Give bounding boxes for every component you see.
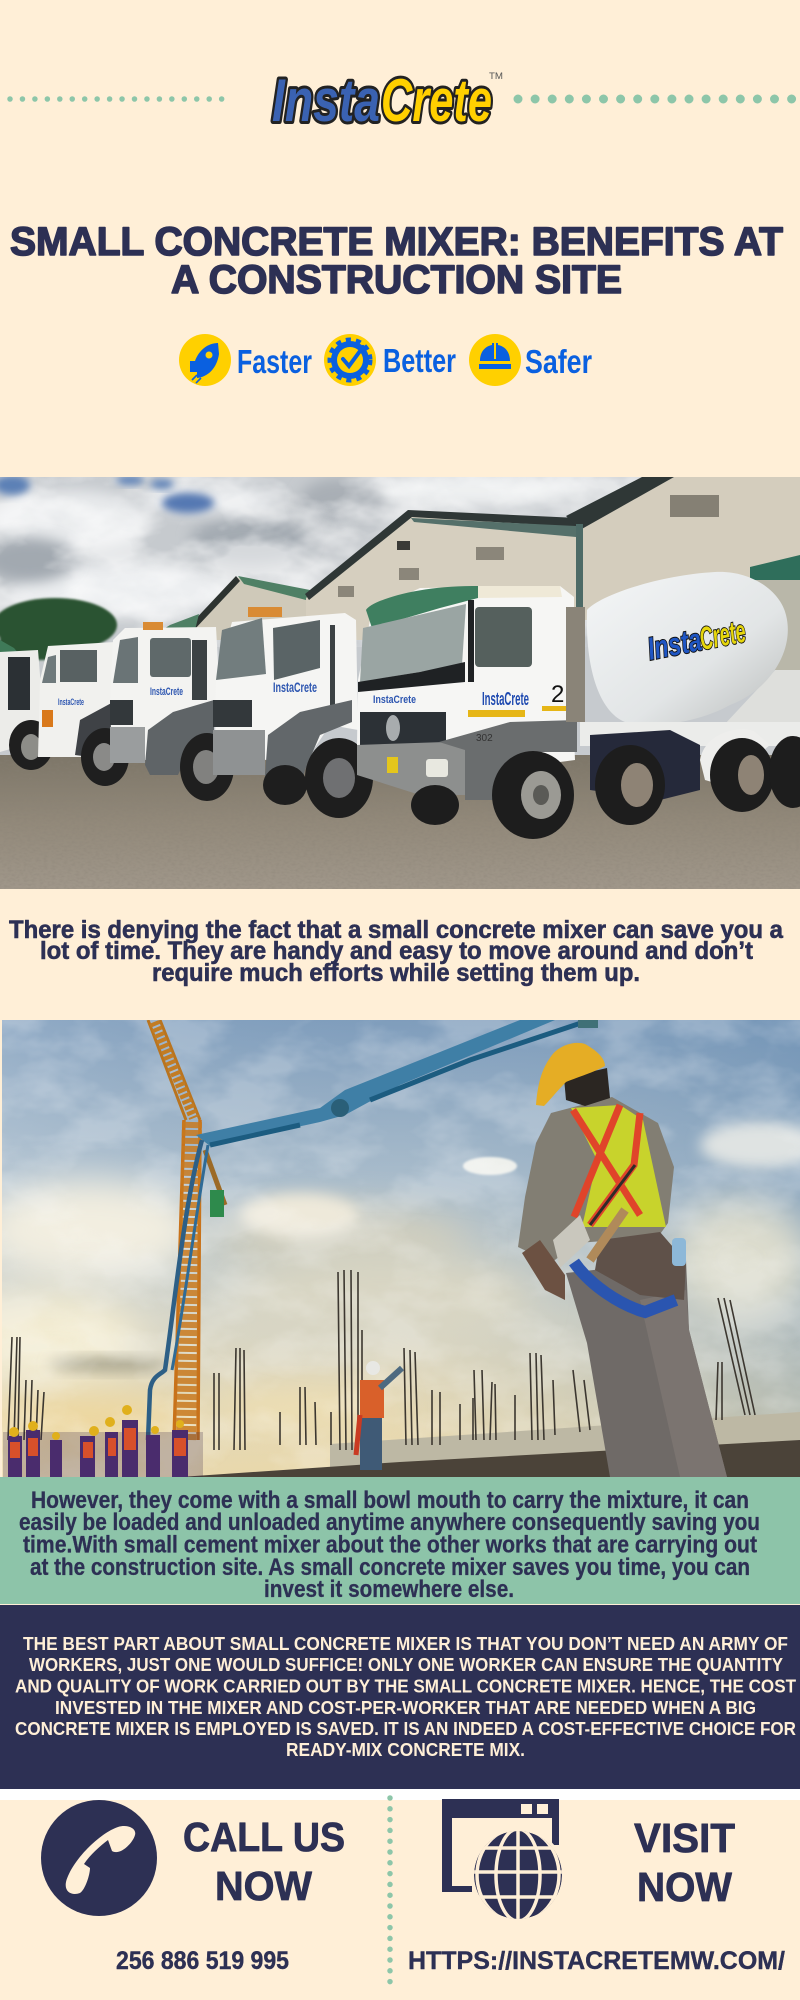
cement drum xyxy=(580,572,800,785)
head and hat xyxy=(564,1068,610,1106)
main truck wheels xyxy=(411,730,800,839)
navy text panel xyxy=(0,1605,800,1789)
cement drum: Crete xyxy=(696,613,748,657)
worker crew at left xyxy=(3,1405,203,1477)
heading: visit now: VISIT xyxy=(634,1815,735,1861)
icon: hard hat, Safer xyxy=(469,334,521,386)
truck 2: InstaCrete xyxy=(150,686,183,698)
tower crane xyxy=(148,1020,225,1440)
benefit badges row xyxy=(179,334,592,386)
header dotted rule left xyxy=(10,96,234,102)
label: Faster: Faster xyxy=(237,343,312,380)
icon: rocket, Faster xyxy=(179,334,231,386)
phone number: 256 886 519 995 xyxy=(116,1947,289,1975)
truck 0 far left xyxy=(0,650,53,770)
warehouse buildings xyxy=(0,477,800,660)
main truck cab: 2 xyxy=(551,681,564,708)
header dotted rule right xyxy=(518,94,792,104)
high-vis vest xyxy=(571,1105,666,1227)
main truck cab: InstaCrete xyxy=(373,694,416,706)
footer dotted divider xyxy=(387,1798,393,1992)
logo: InstaCrete: TM xyxy=(489,71,503,81)
heading: visit now xyxy=(634,1815,735,1910)
paved ground xyxy=(0,755,800,889)
green panel text xyxy=(19,1487,760,1603)
intro text xyxy=(9,916,784,987)
navy panel text xyxy=(15,1633,797,1760)
green text panel xyxy=(0,1477,800,1604)
tree xyxy=(0,598,117,660)
intro text: lot of time. They are handy and easy to move around and don’t xyxy=(40,937,754,965)
heading: call us now: NOW xyxy=(215,1863,312,1909)
truck 2 xyxy=(110,622,234,801)
truck 3 xyxy=(213,607,373,818)
truck 3: InstaCrete xyxy=(273,679,317,695)
logo: InstaCrete: Insta xyxy=(272,67,380,134)
title xyxy=(10,220,783,302)
rebar columns xyxy=(8,1270,755,1450)
heading: visit now: NOW xyxy=(637,1864,732,1910)
icon: gear check, Better xyxy=(324,334,376,386)
harness straps xyxy=(573,1105,640,1225)
clouds xyxy=(0,1020,800,1477)
photo: row of InstaCrete concrete mixer trucks xyxy=(0,474,800,889)
logo: InstaCrete xyxy=(272,67,503,134)
foreground worker xyxy=(518,1043,727,1477)
heading: call us now: CALL US xyxy=(183,1814,345,1860)
truck 1: InstaCrete xyxy=(58,697,84,707)
icon: browser window and globe xyxy=(442,1799,566,1922)
website url: HTTPS://INSTACRETEMW.COM/ xyxy=(408,1947,785,1975)
white spacer strip xyxy=(0,1789,800,1800)
icon: phone xyxy=(41,1800,157,1916)
cement drum: Insta xyxy=(644,621,704,667)
logo: InstaCrete: Crete xyxy=(381,67,492,134)
legs xyxy=(566,1260,727,1477)
navy panel text: INVESTED IN THE MIXER AND COST-PER-WORKER THAT ARE NEEDED WHEN A BIG xyxy=(55,1697,756,1718)
navy panel text: READY-MIX CONCRETE MIX. xyxy=(286,1739,525,1760)
green panel text: invest it somewhere else. xyxy=(264,1576,514,1603)
jacket xyxy=(518,1097,674,1263)
title: SMALL CONCRETE MIXER: BENEFITS AT xyxy=(10,220,783,264)
photo: safety worker watching concrete pump boom xyxy=(0,1020,800,1477)
concrete pump boom xyxy=(148,1020,598,1440)
intro text: There is denying the fact that a small concrete mixer can save you a xyxy=(9,916,784,944)
arm and hand xyxy=(522,1240,565,1300)
main truck cab: InstaCrete xyxy=(482,689,529,709)
sky clouds xyxy=(0,474,680,647)
label: Safer: Safer xyxy=(525,343,592,380)
heading: call us now xyxy=(183,1814,345,1909)
intro text: require much efforts while setting them up. xyxy=(152,959,640,987)
main truck cab xyxy=(357,586,585,800)
title: A CONSTRUCTION SITE xyxy=(171,258,622,302)
ground and wet concrete xyxy=(180,1412,800,1477)
label: Better: Better xyxy=(383,342,456,379)
main truck cab: 302 xyxy=(476,733,493,744)
distant worker with arm raised xyxy=(356,1361,402,1470)
truck 1 xyxy=(38,642,129,786)
